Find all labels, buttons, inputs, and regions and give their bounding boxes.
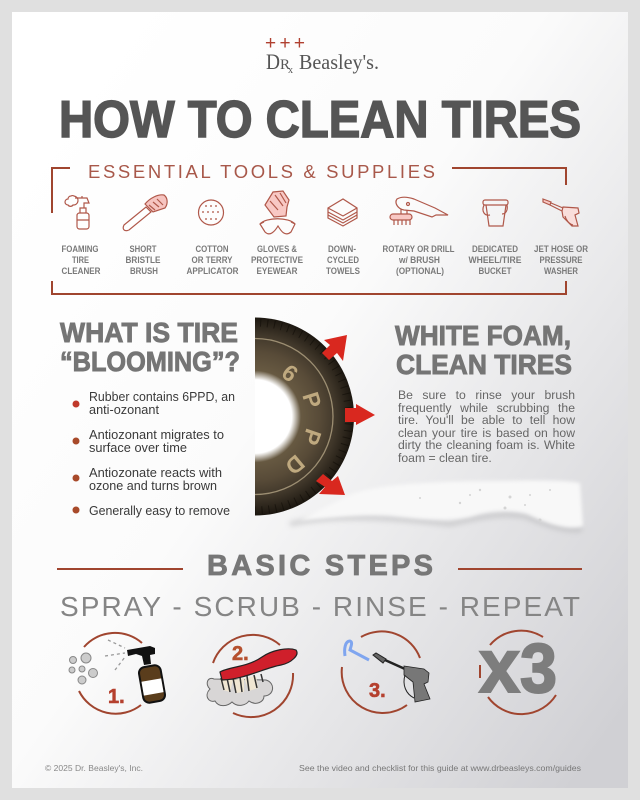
label: jet hose or pressure washer: JET HOSE OR [534,244,588,254]
footer copyright: © 2025 Dr. Beasley's, Inc. [45,763,143,773]
heading: what is tire blooming: WHAT IS TIRE [60,317,238,348]
text: spray scrub rinse repeat: SPRAY - SCRUB - RINSE - REPEAT [60,591,580,622]
label: rotary or drill with brush: w/ BRUSH [398,255,440,265]
label: short bristle brush: BRISTLE [126,255,160,265]
label: rotary or drill with brush: ROTARY OR DRILL [382,244,455,254]
label: cotton or terry applicator: OR TERRY [192,255,232,265]
label: gloves and protective eyewear: GLOVES & [257,244,297,254]
label: down-cycled towels: CYCLED [327,255,359,265]
label: gloves and protective eyewear: EYEWEAR [256,266,298,276]
icon: foaming cleaner [65,196,89,229]
step 2 icon: 2. [232,643,249,665]
footer link: See the video and checklist for this guide at www.drbeasleys.com/guides [299,763,581,773]
paragraph: foam text: tire. You'll be able to tell how [398,413,575,427]
label: jet hose or pressure washer: WASHER [544,266,578,276]
paragraph: foam text: dirty the cleaning foam is. White [398,438,575,452]
step 3 icon: 3. [369,680,386,702]
label: short bristle brush: BRUSH [130,266,158,276]
bullet list: Antiozonate reacts with [89,465,222,480]
logo: D [266,49,280,74]
label: foaming tire cleaner: CLEANER [62,266,101,276]
paragraph: foam text: foam = clean tire. [398,451,492,465]
label: gloves and protective eyewear: PROTECTIVE [251,255,303,265]
bullet list: Antiozonant migrates to [89,427,224,442]
tire lettering: 6 [277,359,303,387]
label: gloves and protective eyewear [251,244,303,276]
logo [265,33,379,76]
x3 icon: x [479,624,520,709]
label: jet hose or pressure washer [534,244,588,276]
label: foaming tire cleaner: TIRE [72,255,89,265]
label: dedicated bucket [468,244,522,276]
heading: white foam clean tires: WHITE FOAM, [395,320,571,351]
logo: +++ [265,33,305,54]
icon: rotary drill [390,197,448,225]
paragraph: foam text: frequently while scrubbing the [398,401,575,415]
bullet list: surface over time [89,440,187,455]
step 1 icon [69,633,166,714]
x3 icon: 3 [520,629,557,707]
label: foaming tire cleaner: FOAMING [62,244,98,254]
bullet list: ozone and turns brown [89,478,217,493]
icon: short bristle brush [123,195,167,231]
bullet list [72,389,235,518]
heading: white foam clean tires: CLEAN TIRES [396,349,572,380]
title: HOW TO CLEAN TIRES [59,90,581,148]
step 1 icon: 1. [108,686,125,708]
arrow: middle [345,404,375,425]
tire lettering: P [297,389,327,411]
icon: jet hose [543,199,579,226]
label: down-cycled towels: TOWELS [326,266,360,276]
label: jet hose or pressure washer: PRESSURE [540,255,582,265]
logo: R [280,57,290,73]
label: short bristle brush [126,244,160,276]
icon: cotton applicator [198,200,224,225]
x3 icon [479,624,557,714]
tire lettering [277,359,327,480]
label: foaming tire cleaner [62,244,101,276]
bullet list: Generally easy to remove [89,503,230,518]
label: dedicated bucket: BUCKET [478,266,512,276]
foam [290,480,583,530]
icon: towels [328,199,357,226]
step 3 icon [342,631,430,713]
tire lettering: P [297,426,327,448]
bullet list: anti-ozonant [89,402,159,417]
label: dedicated bucket: WHEEL/TIRE [468,255,522,265]
label: cotton or terry applicator: COTTON [196,244,228,254]
arrow: lower [316,474,345,495]
icon: bucket [483,200,508,226]
label: cotton or terry applicator: APPLICATOR [186,266,239,276]
tire lettering: D [280,450,310,480]
label: rotary or drill with brush: (OPTIONAL) [396,266,444,276]
paragraph: foam text [398,389,575,465]
tire graphic [255,318,375,516]
paragraph: foam text: clean your tire is based on how [398,426,575,440]
arrow: upper [322,335,347,361]
icon: gloves and eyewear [260,191,295,234]
logo: x [288,65,293,76]
label: rotary or drill with brush [382,244,455,276]
heading: what is tire blooming: “BLOOMING”? [60,346,240,377]
label: cotton or terry applicator [186,244,239,276]
section heading: ESSENTIAL TOOLS & SUPPLIES [88,161,435,182]
label: down-cycled towels [326,244,360,276]
logo: Beasley's. [299,50,379,74]
label: short bristle brush: SHORT [130,244,157,254]
bullet list: Rubber contains 6PPD, an [89,389,235,404]
panel: essential tools and supplies [52,161,588,294]
heading: basic steps: BASIC STEPS [207,550,433,582]
label: dedicated bucket: DEDICATED [472,244,518,254]
step 2 icon [207,635,297,717]
panel frame [52,168,566,294]
label: down-cycled towels: DOWN- [328,244,356,254]
